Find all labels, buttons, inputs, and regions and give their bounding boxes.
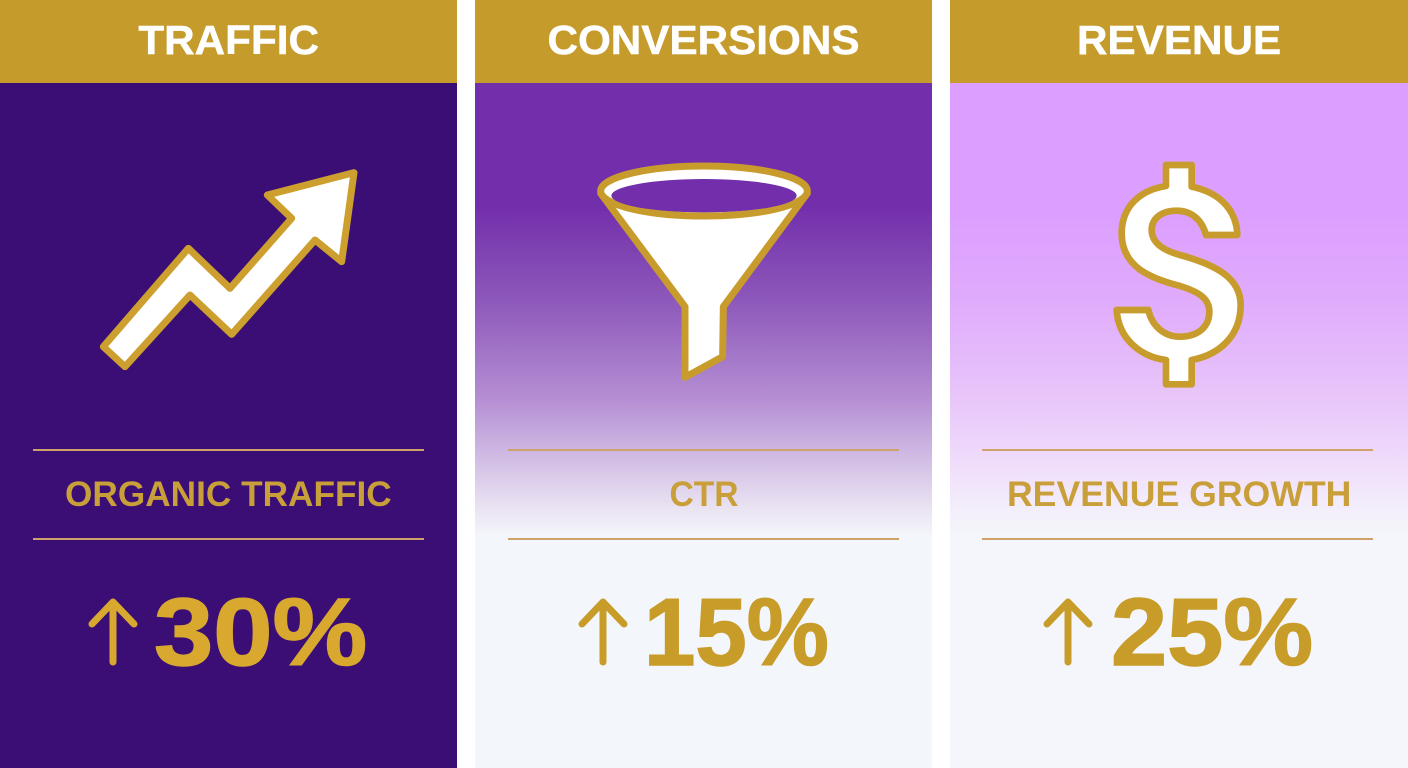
panel: revenue [950,0,1408,768]
label: ctr: CTR [669,475,738,514]
panel: conversions [475,0,932,768]
heading: conversions [475,0,932,83]
heading: traffic [0,0,457,83]
metric: 15%: 15% [644,579,829,686]
label: revenue growth: REVENUE GROWTH [1007,475,1351,514]
icon: up arrow [578,598,628,666]
label: organic traffic: ORGANIC TRAFFIC [65,475,392,514]
icon: up arrow [1044,598,1092,666]
metric: 25%: 25% [1111,579,1313,686]
heading: traffic: TRAFFIC [138,17,319,63]
icon: rising arrow [100,169,358,370]
heading: revenue [950,0,1408,83]
metric: 30%: 30% [154,579,367,686]
icon: dollar sign [1113,162,1244,388]
heading: conversions: CONVERSIONS [547,17,860,63]
heading: revenue: REVENUE [1077,17,1281,63]
panel: traffic [0,0,457,768]
icon: funnel [597,162,811,381]
icon: up arrow [88,598,138,666]
